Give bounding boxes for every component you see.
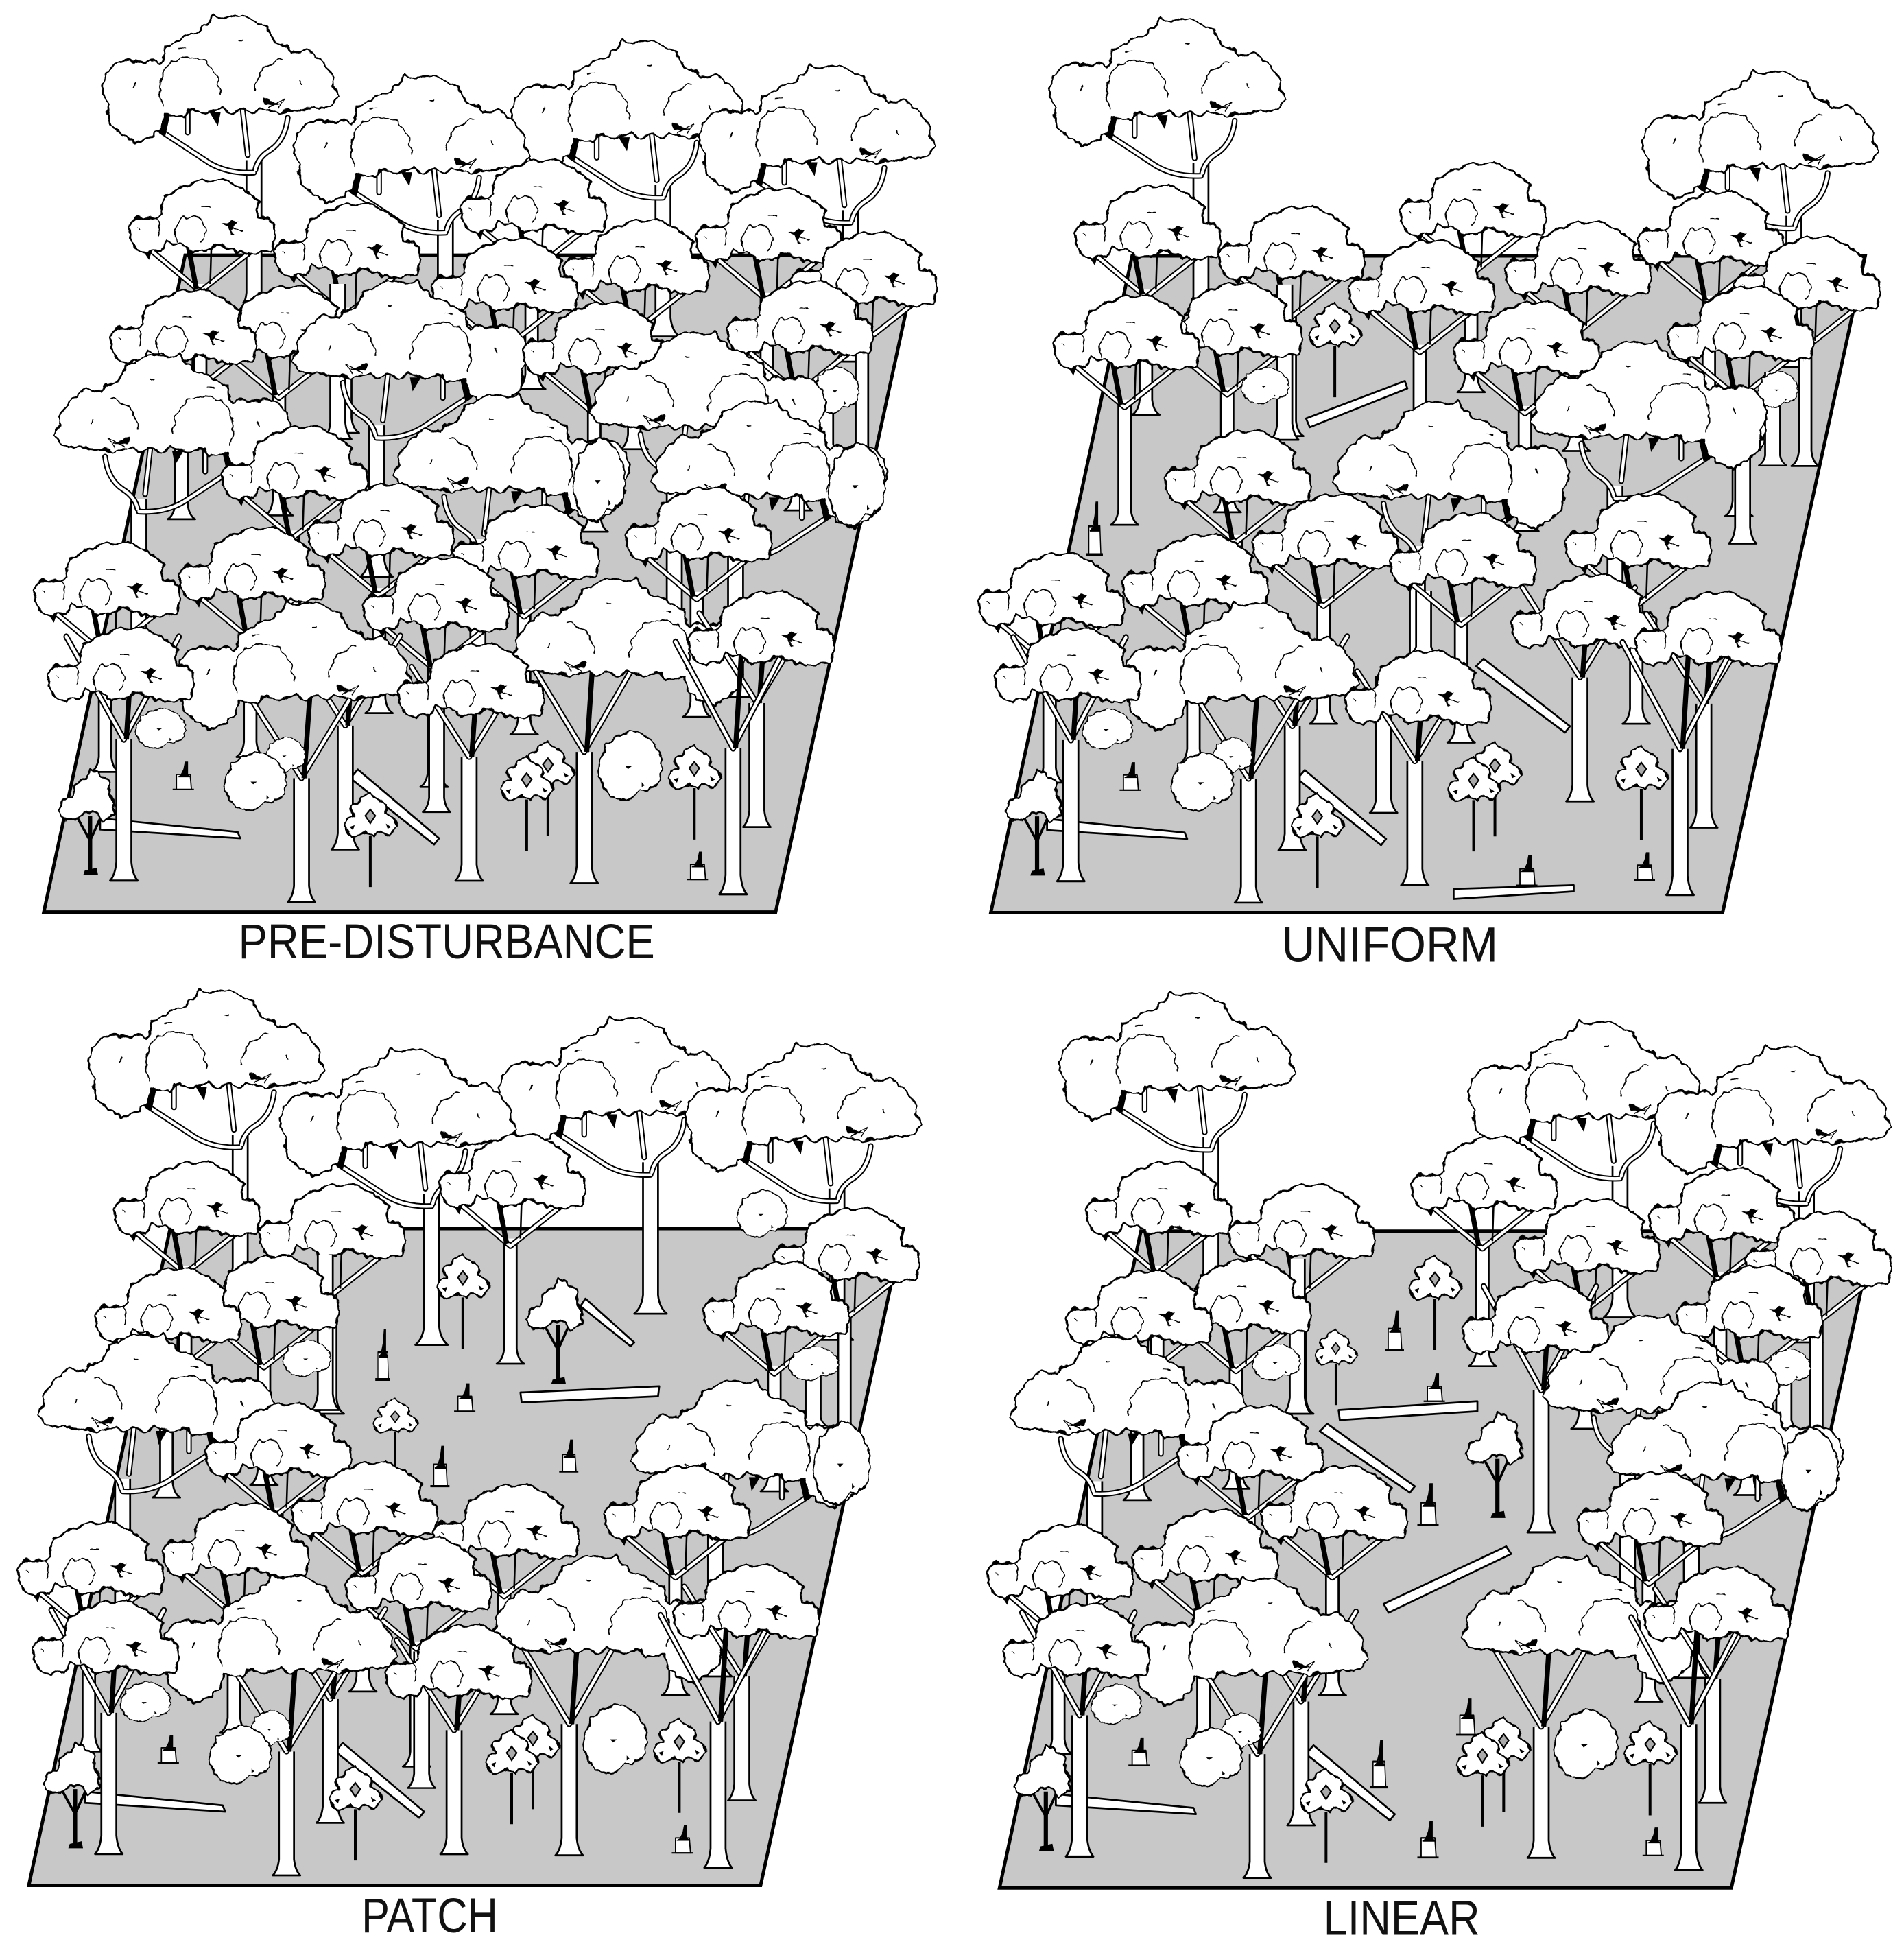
forest floor: uniform: [991, 256, 1865, 913]
trees: dense intact canopy: [34, 15, 938, 902]
trees: canopy with a diagonal linear gap: [987, 992, 1893, 1878]
heading: uniform: UNIFORM: [1282, 919, 1498, 973]
forest floor: pre-disturbance: [44, 255, 918, 912]
panel: uniform disturbance: [978, 18, 1881, 913]
heading: patch: PATCH: [361, 1889, 498, 1943]
panel: patch disturbance: [18, 990, 920, 1886]
trees: canopy with one large patch gap: [18, 990, 920, 1875]
trees: evenly thinned canopy: [978, 18, 1881, 903]
panel: linear disturbance: [987, 992, 1893, 1888]
forest floor: patch: [29, 1229, 903, 1886]
panel: pre-disturbance forest: [34, 15, 938, 912]
heading: pre-disturbance: PRE-DISTURBANCE: [238, 915, 655, 969]
forest floor: linear: [999, 1231, 1874, 1888]
heading: linear: LINEAR: [1324, 1892, 1480, 1946]
